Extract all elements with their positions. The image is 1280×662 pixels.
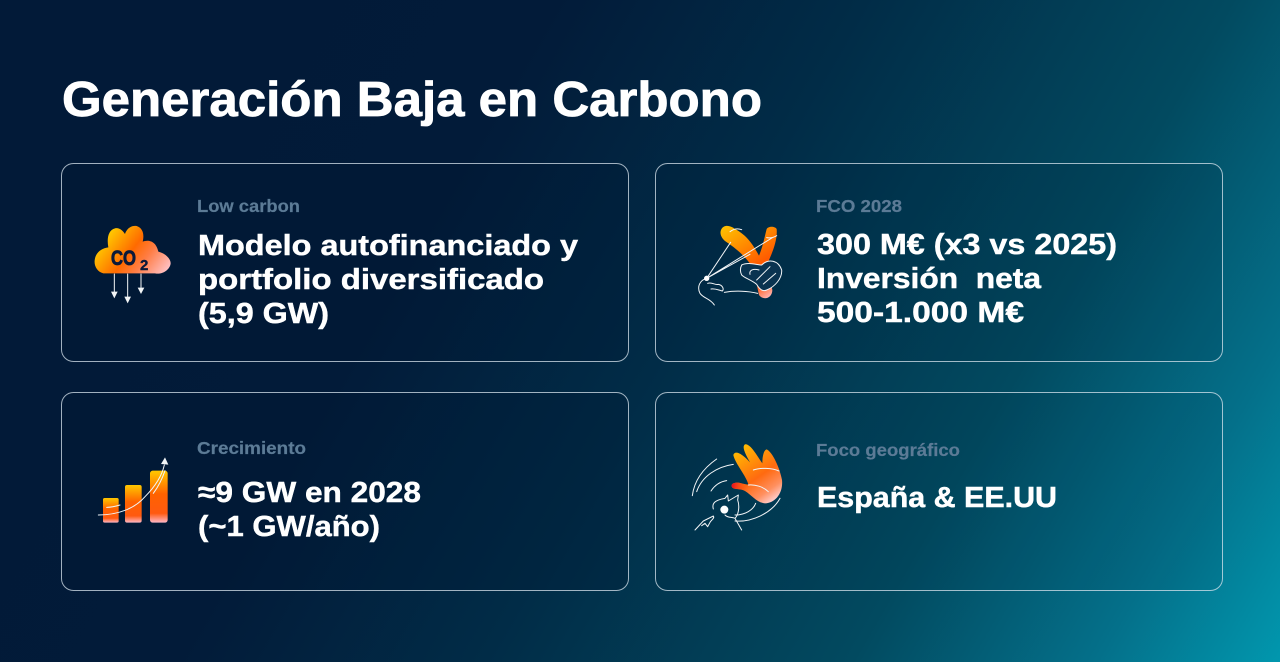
- icon: CO2 cloud: [95, 226, 171, 303]
- panel: crecimiento: [62, 392, 628, 590]
- panel: low carbon: [62, 164, 628, 362]
- text: growth target: (~1 GW/año): [198, 511, 380, 543]
- icon: CO2 cloud: 2: [140, 257, 148, 274]
- title: Generación Baja en Carbono: [62, 73, 762, 127]
- icon: waving hand: [692, 444, 782, 530]
- text: modelo autofinanciado: [198, 230, 578, 330]
- text: growth target: ≈9 GW en 2028: [198, 477, 421, 509]
- text: FCO figures: [817, 229, 1117, 329]
- icon: CO2 cloud: CO: [111, 247, 136, 270]
- text: FCO figures: Inversión neta: [817, 263, 1042, 295]
- label: crecimiento: Crecimiento: [197, 438, 306, 458]
- label: foco geográfico: Foco geográfico: [816, 440, 960, 460]
- label: low carbon: Low carbon: [197, 196, 300, 216]
- text: FCO figures: 300 M€ (x3 vs 2025): [817, 229, 1117, 261]
- text: modelo autofinanciado: portfolio diversificado: [198, 264, 544, 296]
- panel: FCO 2028: [656, 164, 1222, 362]
- text: geographic focus: España & EE.UU: [817, 482, 1057, 514]
- icon: slingshot: [699, 226, 782, 305]
- icon: growth bars: [98, 457, 168, 523]
- text: FCO figures: 500-1.000 M€: [817, 297, 1024, 329]
- text: modelo autofinanciado: Modelo autofinanciado y: [198, 230, 578, 262]
- label: FCO 2028: FCO 2028: [816, 196, 902, 216]
- text: growth target: [198, 477, 421, 543]
- panel: foco geográfico: [656, 392, 1222, 590]
- text: modelo autofinanciado: (5,9 GW): [198, 298, 329, 330]
